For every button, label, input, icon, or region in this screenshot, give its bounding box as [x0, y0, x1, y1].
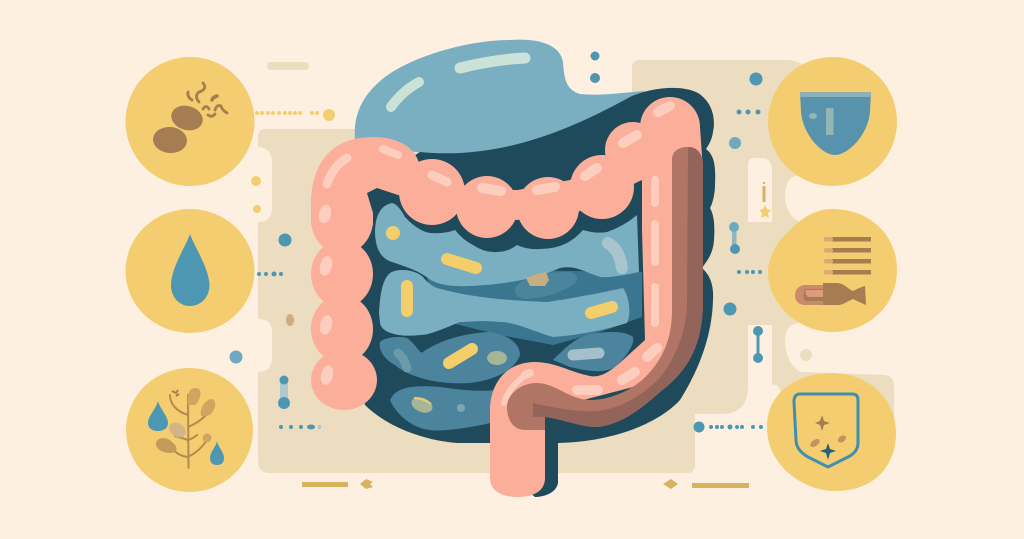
- fold 1: [375, 203, 639, 286]
- colon: muscle band: [507, 147, 703, 430]
- colon highlights: [327, 106, 670, 403]
- fold 2: [379, 270, 629, 337]
- food particles: [398, 243, 622, 368]
- stomach highlights: [391, 58, 525, 107]
- fold 3: [380, 332, 520, 383]
- decorative dots left: [230, 109, 335, 430]
- circle: plant and droplets: [126, 368, 253, 492]
- circle: bullet capsule and list lines: [768, 209, 897, 332]
- panel: beige backdrop: [258, 60, 894, 473]
- small intestine folds: [375, 203, 642, 431]
- colon: muscle band shade: [533, 147, 703, 427]
- circle: bacteria: [126, 57, 254, 186]
- decorative dots right: [590, 52, 812, 432]
- colon: ascending and transverse: [311, 97, 703, 497]
- circle: stomach cup: [768, 57, 897, 186]
- bottom arrows and bars: [302, 479, 749, 489]
- fold 4: [553, 332, 633, 371]
- stomach: [355, 40, 645, 156]
- fold 5: [390, 386, 495, 431]
- colon: descending and tail: [490, 127, 703, 497]
- circle: shield: [767, 373, 896, 491]
- large intestine: [311, 97, 703, 497]
- circle: water drop: [126, 209, 254, 333]
- dark body cavity: [340, 88, 715, 497]
- fold inner patch: [515, 272, 577, 299]
